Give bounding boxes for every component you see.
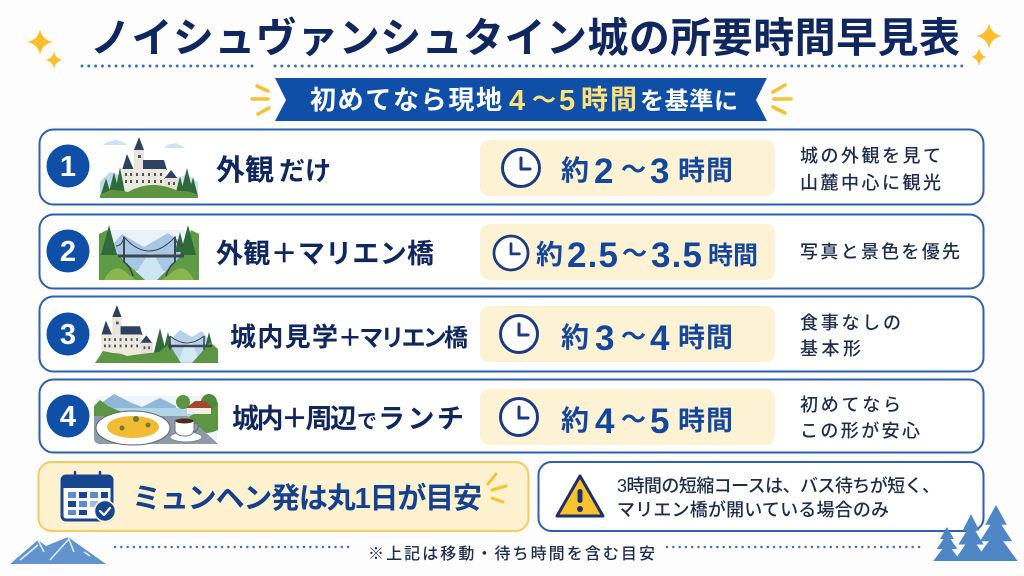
row 2 panel: [40, 214, 984, 288]
time pill 2: 2.5: [567, 236, 618, 275]
warning text: [617, 475, 940, 520]
number 4: [46, 394, 90, 438]
time pill 2: 3.5: [651, 236, 702, 275]
number 2: 2: [60, 236, 76, 268]
row 4 label: [232, 403, 464, 434]
row 4 label: で: [357, 411, 377, 433]
time pill 2: 時間: [708, 242, 758, 270]
warning text: 3時間の短縮コースは、バス待ちが短く、: [617, 475, 940, 496]
description 4: 初めてなら: [800, 395, 901, 415]
illustration: Marienbrucke: [99, 225, 199, 280]
time pill 3: ～: [621, 323, 646, 351]
description 3: 基本形: [800, 339, 861, 359]
time pill 3: 4: [650, 319, 670, 358]
icon: rays right: [773, 85, 791, 113]
number 1: 1: [60, 151, 76, 183]
illustration: lunch: [94, 394, 218, 445]
time pill 1: 2: [594, 152, 613, 191]
description 2: 写真と景色を優先: [800, 242, 960, 262]
time pill 4: 時間: [678, 406, 733, 436]
warning text: マリエン橋が開いている場合のみ: [617, 499, 889, 520]
illustration: castle: [100, 137, 198, 198]
row 1 label: 外観: [216, 154, 274, 187]
icon: rays: [488, 474, 506, 502]
time pill 4: [480, 389, 775, 445]
time pill 3: 3: [595, 319, 614, 358]
row 2 label: 外観＋マリエン橋: [216, 239, 434, 269]
description 4: [800, 395, 920, 441]
row 1 panel: [40, 130, 984, 204]
row 3 label: ＋マリエン橋: [338, 325, 468, 352]
time pill 4: 5: [650, 402, 669, 441]
time pill 1: 時間: [678, 156, 733, 186]
time pill 3: [480, 306, 775, 362]
row 3 label: [230, 322, 468, 352]
description 1: 城の外観を見て: [800, 146, 941, 166]
description 4: この形が安心: [800, 420, 920, 441]
row 3 panel: [40, 296, 984, 372]
time pill 2: [480, 224, 775, 280]
time pill 1: [480, 140, 775, 196]
icon: warning triangle: [557, 476, 603, 516]
number 3: [46, 312, 90, 356]
time pill 1: 約: [561, 155, 589, 186]
subtitle text: 初めてなら現地: [310, 85, 502, 115]
row 1 label: だけ: [279, 156, 331, 186]
time pill 1: 3: [650, 152, 669, 191]
icon: mountains: [10, 537, 106, 564]
subtitle text: ～: [532, 87, 556, 114]
time pill 1: ～: [621, 156, 646, 184]
illustration: castle and bridge: [95, 305, 218, 363]
description 1: [800, 146, 941, 193]
time pill 3: 時間: [678, 323, 733, 353]
subtitle text: 4: [509, 85, 525, 117]
icon: rays left: [252, 86, 269, 114]
subtitle text: [310, 85, 738, 117]
subtitle text: 時間: [581, 85, 637, 115]
callout: warning: [538, 462, 984, 531]
subtitle text: を基準に: [640, 88, 738, 115]
description 1: 山麓中心に観光: [800, 173, 941, 193]
time pill 4: ～: [621, 406, 646, 434]
row 4 label: ランチ: [378, 404, 464, 434]
subtitle banner: [275, 78, 767, 121]
time pill 3: 約: [561, 322, 589, 353]
time pill 4: 約: [561, 405, 589, 436]
number 4: 4: [60, 401, 76, 433]
number 2: [46, 230, 90, 272]
icon: sparkles right: [971, 23, 1002, 66]
icon: sparkles left: [27, 29, 63, 69]
number 1: [46, 144, 90, 188]
icon: pine trees: [933, 505, 1018, 561]
row 4 label: 城内＋周辺: [232, 403, 357, 434]
row 1 label: [216, 154, 331, 187]
description 3: 食事なしの: [800, 313, 901, 333]
callout text: ミュンヘン発は丸1日が目安: [132, 481, 482, 515]
time pill 4: 4: [595, 402, 615, 441]
number 3: 3: [60, 319, 76, 351]
footer note: ※上記は移動・待ち時間を含む目安: [368, 545, 655, 563]
icon: calendar: [62, 472, 116, 522]
row 3 label: 城内見学: [230, 322, 338, 352]
title: ノイシュヴァンシュタイン城の所要時間早見表: [90, 15, 960, 61]
time pill 2: 約: [536, 240, 563, 270]
description 3: [800, 313, 901, 359]
row 4 panel: [40, 380, 984, 452]
subtitle text: 5: [559, 85, 575, 117]
time pill 2: ～: [622, 240, 647, 268]
callout: Munich day trip: [38, 462, 528, 531]
